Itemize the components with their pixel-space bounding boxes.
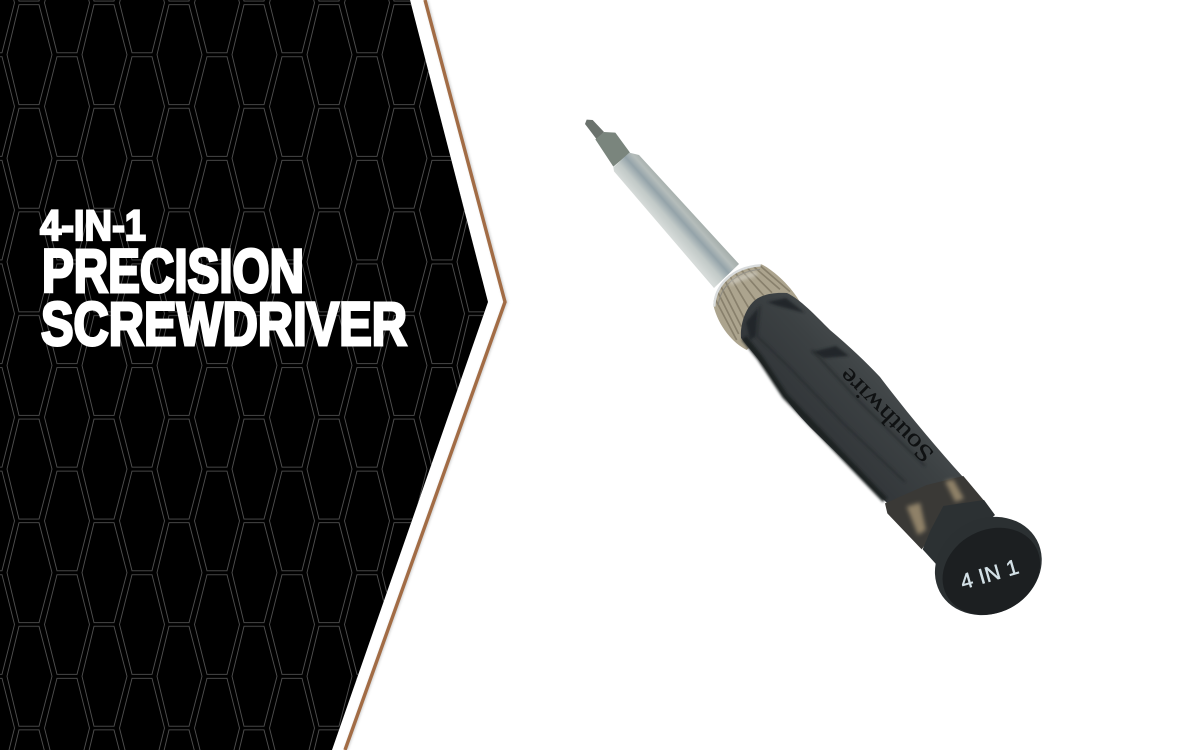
hex bit	[595, 132, 630, 167]
title line: SCREWDRIVER: SCREWDRIVER	[41, 290, 407, 358]
rubber grip	[741, 293, 963, 503]
screwdriver tip, shaft and collar	[585, 120, 801, 350]
knurled collar	[713, 264, 801, 350]
metal band	[885, 476, 984, 549]
cap side	[918, 498, 1059, 634]
title line: PRECISION: PRECISION	[42, 237, 304, 305]
brand text on grip: Southwire	[835, 362, 939, 467]
cap label: 4 IN 1	[958, 555, 1021, 594]
cap face	[927, 511, 1055, 632]
band highlights	[907, 479, 964, 535]
bit tip	[585, 120, 604, 139]
end of handle and cap	[885, 476, 1059, 634]
title line: 4-IN-1: 4-IN-1	[40, 202, 146, 250]
grip facet edges	[757, 306, 925, 482]
chevron outline: copper line	[345, 0, 506, 750]
panel: black chevron with hexagon pattern	[0, 0, 488, 750]
grip facets	[746, 298, 849, 358]
title	[40, 202, 407, 358]
neck	[923, 500, 995, 567]
metal shaft	[613, 153, 739, 288]
product illustration: screwdriver	[585, 120, 1059, 634]
grip shadow edge	[744, 338, 885, 500]
